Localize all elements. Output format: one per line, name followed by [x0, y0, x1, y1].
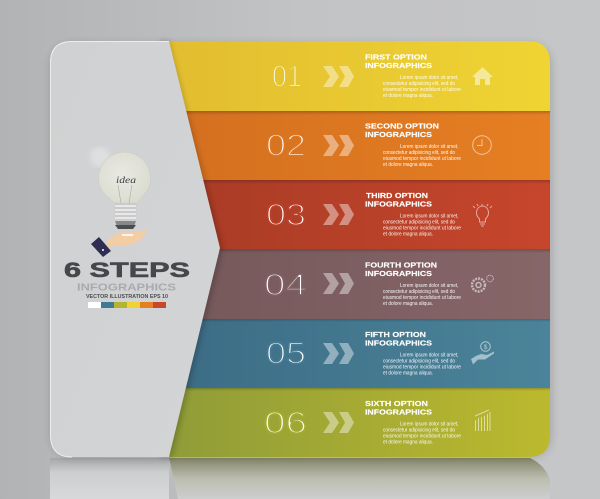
option 1 text: et dolore magna aliqua. [383, 93, 433, 99]
option 2 text: consectetur adipisicing elit, sed do [383, 150, 455, 156]
option 2 text [365, 122, 461, 168]
color legend bar [88, 302, 166, 308]
option 2 text: Lorem ipsum dolor sit amet, [400, 144, 458, 150]
option 3 text: INFOGRAPHICS [365, 200, 432, 208]
option 6 text: Lorem ipsum dolor sit amet, [400, 422, 458, 428]
number 03: 03 [266, 197, 306, 232]
option 3 text [365, 191, 461, 238]
icon: light bulb [473, 204, 492, 226]
chevrons 5 [323, 343, 354, 364]
band 1: yellow [169, 41, 550, 111]
option 6 text [365, 399, 461, 446]
icon: house [472, 67, 493, 85]
option 5 text: et dolore magna aliqua. [383, 370, 433, 376]
number 06: 06 [264, 405, 307, 440]
band 2: orange [169, 111, 550, 180]
option 3 text: Lorem ipsum dolor sit amet, [400, 214, 458, 220]
reflection under the card [50, 458, 550, 499]
band 3: red [169, 180, 550, 250]
option 6 text: INFOGRAPHICS [365, 408, 432, 416]
icon: gears [472, 275, 493, 292]
title: 6 STEPS: 6 STEPS [64, 259, 190, 282]
icon: hand with dollar [471, 342, 494, 364]
icon: light bulb with idea: idea [116, 176, 136, 186]
caption: VECTOR ILLUSTRATION EPS 10 [86, 294, 168, 300]
option 6 text: consectetur adipisicing elit, sed do [383, 428, 455, 434]
option 1 text [365, 52, 461, 99]
option 5 text: eiusmod tempor incididunt ut labore [383, 364, 461, 370]
option 5 text: consectetur adipisicing elit, sed do [383, 358, 455, 364]
option 5 text [365, 330, 461, 376]
option 3 text: et dolore magna aliqua. [383, 232, 433, 238]
option 2 text: et dolore magna aliqua. [383, 162, 433, 168]
chevrons 2 [323, 135, 354, 156]
chevrons 1 [323, 66, 354, 87]
option 4 text: FOURTH OPTION [365, 260, 437, 270]
option 3 text: eiusmod tempor incididunt ut labore [383, 226, 461, 232]
option 6 text: et dolore magna aliqua. [383, 440, 433, 446]
card shadow [50, 43, 552, 458]
option 1 text: Lorem ipsum dolor sit amet, [400, 75, 458, 81]
option 4 text: consectetur adipisicing elit, sed do [383, 289, 455, 295]
option 6 text: eiusmod tempor incididunt ut labore [383, 434, 461, 440]
icon: light bulb with idea [90, 147, 150, 229]
option 2 text: eiusmod tempor incididunt ut labore [383, 156, 461, 162]
option 6 text: SIXTH OPTION [365, 399, 428, 408]
option 3 text: consectetur adipisicing elit, sed do [383, 220, 455, 226]
number 02: 02 [266, 128, 306, 162]
number 04: 04 [264, 267, 307, 302]
band 5: blue [169, 319, 550, 388]
option 1 text: consectetur adipisicing elit, sed do [383, 81, 455, 87]
option 3 text: THIRD OPTION [366, 191, 428, 200]
option 4 text: Lorem ipsum dolor sit amet, [400, 283, 458, 289]
icon: bar chart [475, 410, 490, 431]
left panel shadow [160, 41, 223, 457]
band 6: green [169, 388, 550, 457]
band 4: mauve [169, 249, 550, 319]
option 4 text: et dolore magna aliqua. [383, 301, 433, 307]
option 1 text: INFOGRAPHICS [365, 61, 432, 70]
left panel [50, 41, 220, 457]
option 5 text: FIFTH OPTION [365, 330, 426, 339]
number 01: 01 [272, 58, 302, 94]
option 5 text: Lorem ipsum dolor sit amet, [400, 352, 458, 358]
icon: hand [91, 230, 147, 257]
chevrons 3 [323, 204, 354, 225]
chevrons 4 [323, 273, 354, 294]
chevrons 6 [323, 412, 354, 433]
number 05: 05 [266, 336, 306, 370]
option 5 text: INFOGRAPHICS [365, 338, 432, 348]
option 4 text: INFOGRAPHICS [365, 269, 432, 278]
icon: hand with dollar: $ [484, 344, 488, 351]
option 1 text: eiusmod tempor incididunt ut labore [383, 87, 461, 93]
option 4 text [365, 260, 461, 307]
option 2 text: SECOND OPTION [365, 122, 439, 130]
option 4 text: eiusmod tempor incididunt ut labore [383, 295, 461, 301]
icon: clock [473, 136, 491, 154]
subtitle: INFOGRAPHICS: INFOGRAPHICS [77, 282, 176, 294]
option 1 text: FIRST OPTION [365, 52, 427, 62]
option 2 text: INFOGRAPHICS [365, 130, 432, 139]
